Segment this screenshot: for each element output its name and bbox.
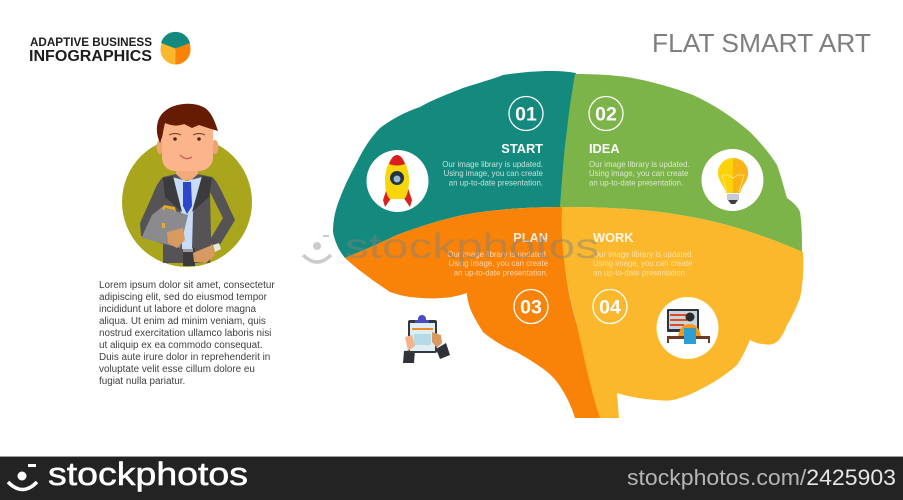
icon: watermark face [303, 236, 331, 262]
text block: plan: Using image, you can create [449, 259, 549, 268]
text block: plan [447, 230, 549, 278]
badge 01: 01 [515, 104, 537, 126]
icon: logo pie [160, 32, 190, 64]
footer bar [0, 456, 903, 500]
brain diagram [333, 71, 803, 418]
text block: work: WORK [593, 230, 634, 245]
body paragraph: voluptate velit esse cillum dolore eu [99, 364, 255, 375]
text block: start: an up-to-date presentation. [449, 178, 543, 188]
lapels [163, 176, 212, 212]
badge 03: 03 [520, 296, 542, 318]
logo heading: INFOGRAPHICS [29, 48, 152, 65]
text block: idea: Using image, you can create [589, 169, 689, 178]
trousers [183, 248, 195, 266]
briefcase [142, 207, 188, 248]
ears [156, 140, 164, 154]
badge 01 [509, 96, 543, 130]
text block: start [442, 141, 544, 188]
body paragraph: fugiat nulla pariatur. [99, 376, 185, 387]
brain segment: start [333, 71, 576, 258]
brain segment: work [562, 207, 803, 418]
badge 02 [589, 96, 623, 130]
footer wordmark: stockphotos [48, 456, 248, 492]
icon: rocket [366, 150, 428, 212]
body paragraph: Lorem ipsum dolor sit amet, consectetur [99, 280, 275, 291]
body paragraph: adipiscing elit, sed do eiusmod tempor [99, 292, 268, 303]
smile [180, 155, 192, 159]
text block: work [593, 230, 694, 278]
body paragraph: aliqua. Ut enim ad minim veniam, quis [99, 316, 266, 327]
badge 04: 04 [599, 296, 621, 318]
text block: start: Using image, you can create [444, 169, 544, 178]
neck [176, 165, 198, 180]
hand on case [167, 228, 185, 248]
body paragraph: nostrud exercitation ullamco laboris nisi [99, 328, 271, 339]
icon: person at computer [656, 297, 718, 359]
eyes [173, 137, 177, 141]
icon: businessman portrait [122, 104, 252, 267]
text block: work: an up-to-date presentation. [593, 268, 687, 278]
hair [157, 104, 218, 143]
body paragraph: incididunt ut labore et dolore magna [99, 304, 257, 315]
logo heading: ADAPTIVE BUSINESS [30, 36, 152, 49]
gap between arm and torso [210, 192, 223, 238]
text block: plan: PLAN [513, 230, 548, 245]
text block: idea [589, 141, 690, 188]
badge 04 [593, 290, 627, 324]
suit [140, 174, 235, 263]
brain segment: idea [560, 74, 802, 252]
body paragraph: Duis aute irure dolor in reprehenderit in [99, 352, 270, 363]
watermark [303, 227, 599, 266]
badge 02: 02 [595, 104, 617, 126]
text block: idea: Our image library is updated. [589, 160, 690, 169]
footer image id: stockphotos.com/ 2425903 [627, 465, 896, 490]
watermark wordmark: stockphotos [345, 227, 599, 266]
text block: start: START [501, 141, 543, 156]
badge 03 [514, 290, 548, 324]
logo heading [29, 36, 152, 65]
body paragraph: ut aliquip ex ea commodo consequat. [99, 340, 263, 351]
brain segment: plan [345, 207, 602, 418]
face [162, 122, 213, 171]
body paragraph [99, 280, 275, 387]
text block: work: Using image, you can create [593, 259, 693, 268]
watch [213, 243, 221, 252]
text block: idea: IDEA [589, 141, 620, 156]
text block: start: Our image library is updated. [442, 160, 543, 169]
text block: plan: an up-to-date presentation. [454, 268, 548, 278]
hand on hip [193, 245, 215, 263]
tie [183, 182, 192, 214]
title: FLAT SMART ART [652, 28, 871, 58]
shirt [172, 177, 202, 249]
text block: work: Our image library is updated. [593, 250, 694, 259]
icon: light bulb [702, 149, 764, 211]
icon: hands with clipboard [403, 315, 450, 363]
text block: idea: an up-to-date presentation. [589, 178, 683, 188]
text block: plan: Our image library is updated. [447, 250, 548, 259]
icon: footer logo face [8, 464, 37, 490]
